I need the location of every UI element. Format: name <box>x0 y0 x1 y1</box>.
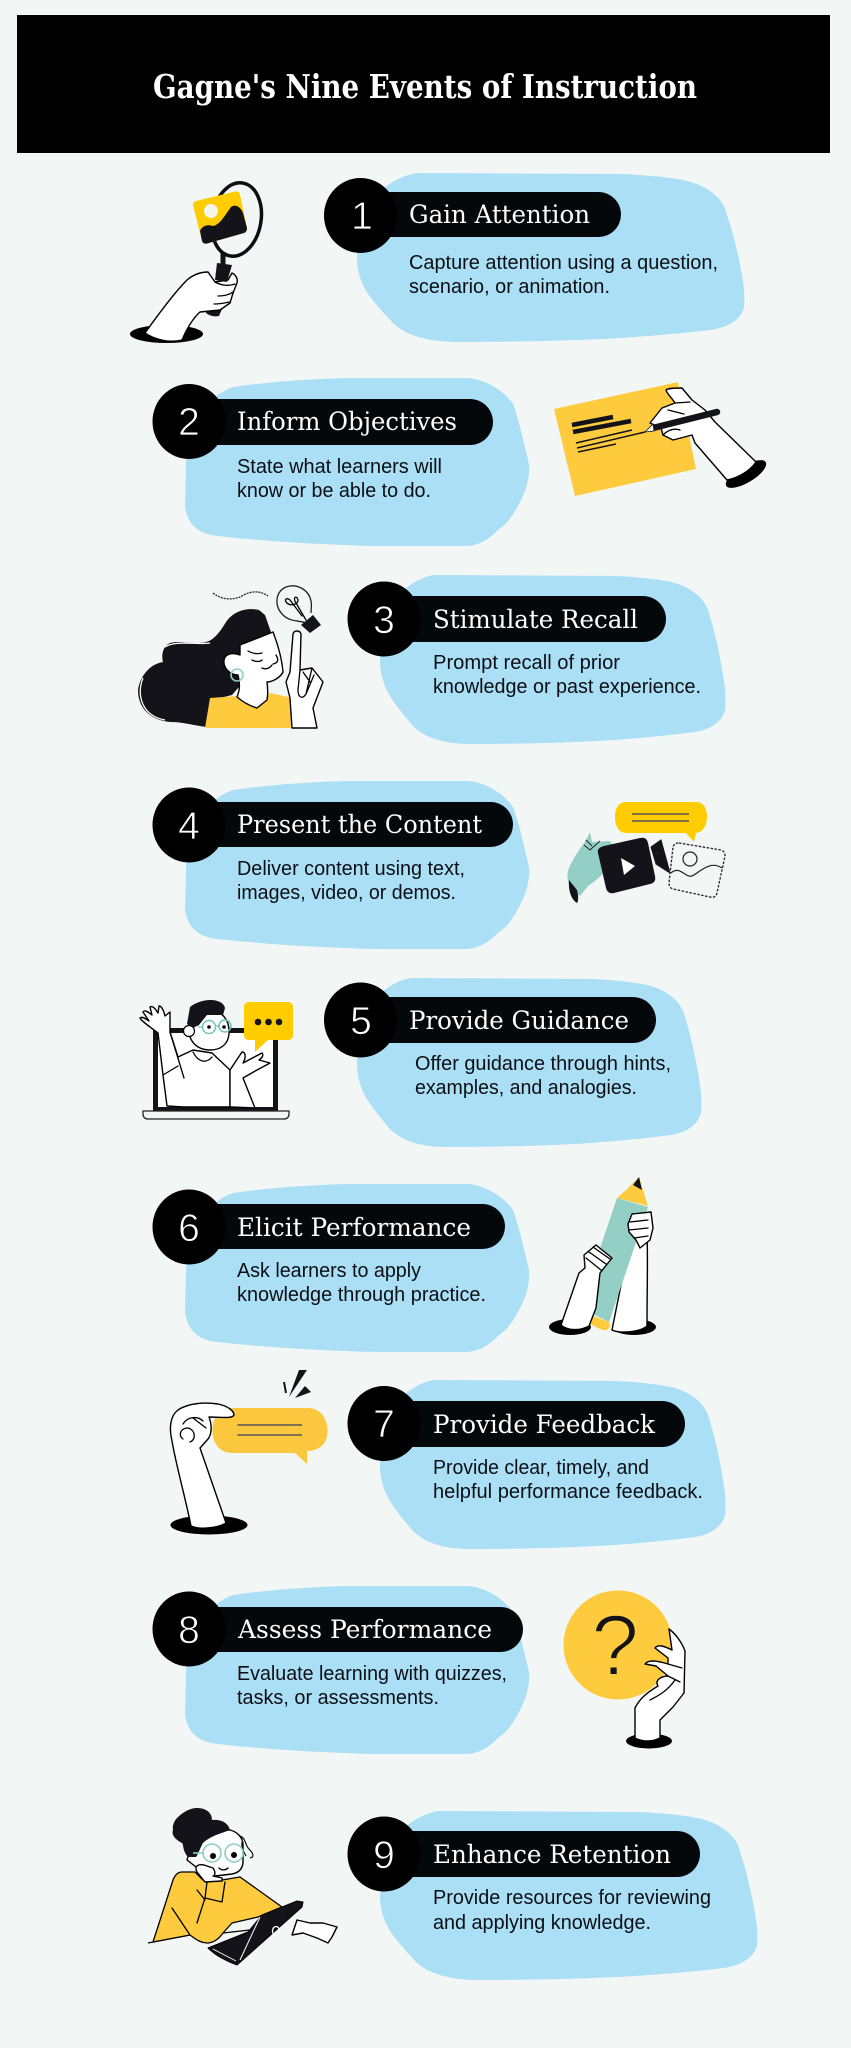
icon: woman with idea and light bulb <box>138 586 323 728</box>
panel: step 1 gain attention: Capture attention using a question, <box>409 252 718 274</box>
panel: step 4 present the content: Deliver content using text, <box>237 858 465 880</box>
panel: step 2 inform objectives: Inform Objectives <box>237 407 457 436</box>
panel: step 8 assess performance: Assess Performance <box>237 1615 492 1644</box>
panel: step 8 assess performance: 8 <box>178 1609 200 1652</box>
panel: step 3 stimulate recall: Prompt recall of prior <box>433 652 620 674</box>
panel: step 7 provide feedback: Provide clear, timely, and <box>433 1457 649 1479</box>
panel: step 9 enhance retention <box>348 1811 757 1980</box>
panel: step 5 provide guidance: Offer guidance through hints, <box>415 1053 671 1075</box>
panel: step 7 provide feedback: Provide Feedback <box>433 1410 656 1439</box>
panel: step 6 elicit performance: knowledge through practice. <box>237 1284 486 1306</box>
panel: step 5 provide guidance: examples, and analogies. <box>415 1077 637 1099</box>
panel: step 6 elicit performance: Elicit Performance <box>237 1213 471 1242</box>
panel: step 9 enhance retention: and applying knowledge. <box>433 1912 651 1934</box>
panel: step 9 enhance retention: Enhance Retention <box>433 1840 671 1869</box>
icon: hand holding magnifier over picture <box>130 179 267 343</box>
panel: step 5 provide guidance: Provide Guidance <box>409 1006 629 1035</box>
panel: step 1 gain attention: 1 <box>351 195 373 238</box>
panel: step 5 provide guidance <box>324 978 701 1147</box>
panel: step 2 inform objectives: 2 <box>178 401 200 444</box>
panel: step 7 provide feedback: helpful performance feedback. <box>433 1481 703 1503</box>
icon: hand holding a question mark circle <box>564 1590 685 1748</box>
panel: step 1 gain attention: scenario, or animation. <box>409 276 610 298</box>
panel: step 8 assess performance: tasks, or assessments. <box>237 1687 439 1709</box>
panel: step 3 stimulate recall: Stimulate Recall <box>433 605 638 634</box>
panel: step 4 present the content: images, video, or demos. <box>237 882 456 904</box>
panel: step 7 provide feedback <box>348 1380 726 1549</box>
panel: step 4 present the content: Present the Content <box>237 810 482 839</box>
panel: step 3 stimulate recall: 3 <box>373 599 395 642</box>
panel: step 8 assess performance: Evaluate learning with quizzes, <box>237 1663 507 1685</box>
panel: step 6 elicit performance <box>152 1184 529 1352</box>
panel: step 9 enhance retention: 9 <box>373 1834 395 1877</box>
panel: step 9 enhance retention: Provide resources for reviewing <box>433 1887 711 1909</box>
panel: step 2 inform objectives: State what learners will <box>237 456 442 478</box>
panel: step 6 elicit performance: Ask learners to apply <box>237 1260 421 1282</box>
panel: step 4 present the content <box>152 781 529 949</box>
panel: step 5 provide guidance: 5 <box>350 1000 372 1043</box>
panel: step 7 provide feedback: 7 <box>373 1403 395 1446</box>
panel: step 8 assess performance <box>152 1586 529 1754</box>
panel: step 1 gain attention: Gain Attention <box>409 200 590 229</box>
icon: woman with glasses using a laptop <box>148 1808 337 1965</box>
panel: step 6 elicit performance: 6 <box>178 1207 200 1250</box>
icon: hand holding a question mark circle: ? <box>591 1598 639 1694</box>
icon: man waving from a laptop screen <box>140 1000 293 1119</box>
icon: hand holding a yellow speech bubble <box>170 1370 328 1534</box>
icon: hand writing on yellow paper <box>554 382 770 496</box>
panel: step 3 stimulate recall <box>348 575 726 744</box>
icon: video camera, chat bubble and image <box>567 802 725 903</box>
panel: step 3 stimulate recall: knowledge or past experience. <box>433 676 701 698</box>
icon: two hands holding a giant pencil <box>549 1177 656 1335</box>
title banner: Gagne's Nine Events of Instruction <box>153 67 697 106</box>
panel: step 4 present the content: 4 <box>178 805 200 848</box>
title banner <box>17 15 830 153</box>
panel: step 2 inform objectives: know or be able to do. <box>237 480 431 502</box>
panel: step 1 gain attention <box>324 173 744 342</box>
panel: step 2 inform objectives <box>152 378 529 546</box>
